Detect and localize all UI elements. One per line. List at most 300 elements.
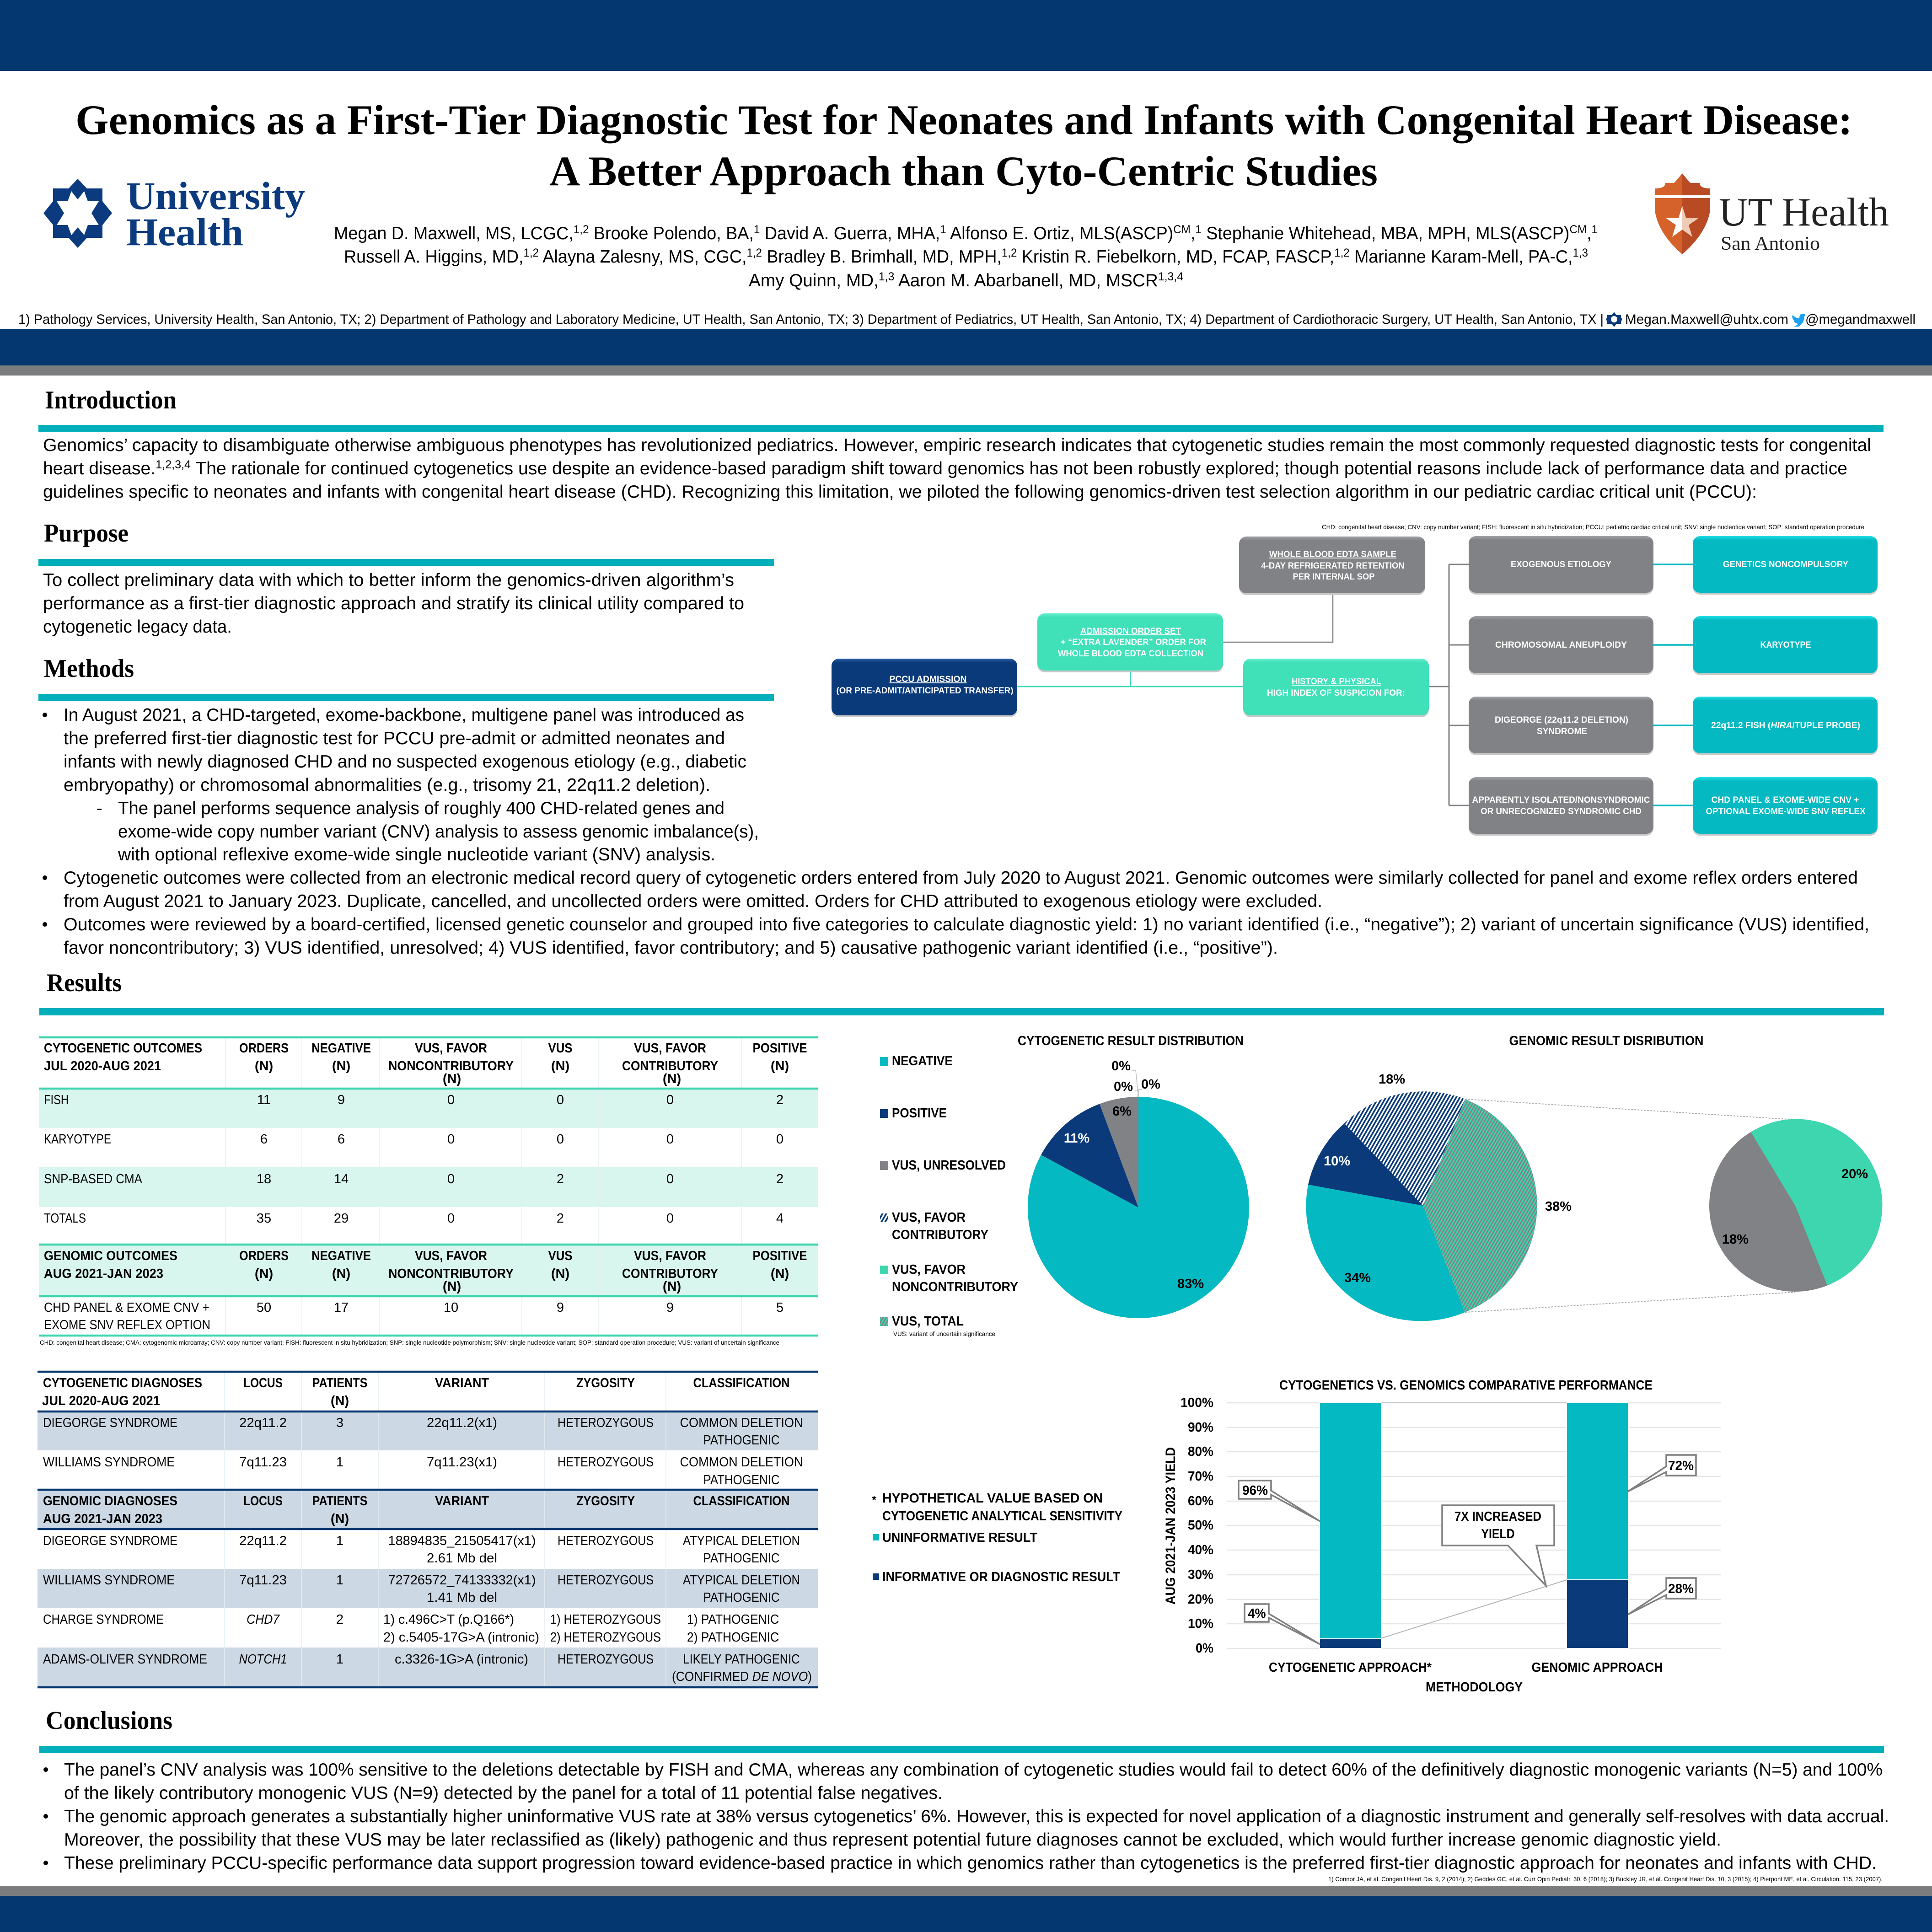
authors: CM [1173, 223, 1191, 236]
text: methods: In August 2021, a CHD-targeted, exome-backbone, multigene panel was introduced as [64, 705, 744, 725]
VUS breakdown pie: 20% [1841, 1167, 1868, 1181]
authors: 1,3,4 [1158, 270, 1183, 283]
table rows: genomic diagnoses: CHARGE SYNDROME [43, 1612, 164, 1627]
table rows: genomic diagnoses: ATYPICAL DELETION [683, 1534, 800, 1548]
legend: result categories: VUS, FAVOR [892, 1210, 966, 1225]
table header: genomic outcomes: GENOMIC OUTCOMES [44, 1249, 177, 1263]
table rows: cytogenetic outcomes: 35 [257, 1211, 271, 1226]
table rows: cytogenetic outcomes: 0 [776, 1132, 784, 1147]
table rows: cytogenetic outcomes: 2 [557, 1211, 564, 1226]
table rows: cytogenetic outcomes: 6 [338, 1132, 345, 1147]
table header: genomic outcomes: VUS, FAVOR [634, 1249, 706, 1263]
text: purpose: performance as a first-tier diagnostic approach and stratify its clinical utility compared to [43, 594, 744, 613]
table header: genomic outcomes: (N) [255, 1267, 273, 1281]
top banner [0, 0, 1932, 71]
table rows: genomic diagnoses: 2) HETEROZYGOUS [550, 1630, 661, 1645]
table rows: cytogenetic diagnoses: 1 [336, 1455, 343, 1470]
table rows: cytogenetic outcomes: 2 [776, 1172, 784, 1186]
authors: Marianne Karam-Mell, PA-C, [1350, 247, 1573, 267]
callout: 28%: 28% [1668, 1582, 1694, 1596]
table rows: cytogenetic outcomes: 0 [666, 1093, 674, 1107]
table header: cytogenetic outcomes: CONTRIBUTORY [622, 1059, 718, 1073]
text: conclusions: These preliminary PCCU-specific performance data support progression toward evidence-based practice in which genomics rather than cytogenetics is the preferred first-tier diagnostic approach for neonates and infants with CHD. [64, 1853, 1877, 1873]
table header: cytogenetic outcomes: VUS, FAVOR [415, 1041, 487, 1056]
table rows: cytogenetic outcomes: 29 [334, 1211, 349, 1226]
box: history and physical: HIGH INDEX OF SUSPICION FOR: [1267, 688, 1405, 698]
table header: cytogenetic outcomes: (N) [443, 1072, 461, 1086]
legend: result categories: POSITIVE [892, 1106, 947, 1121]
table rows: genomic diagnoses: DIGEORGE SYNDROME [43, 1534, 177, 1548]
table row: genomic outcomes: 5 [776, 1300, 784, 1315]
authors: Russell A. Higgins, MD, [344, 247, 530, 267]
table header: cytogenetic diagnoses: PATIENTS [312, 1376, 368, 1390]
row: chromosomal aneuploidy: KARYOTYPE [1760, 640, 1811, 650]
authors: 1,2 [574, 223, 589, 236]
table header: genomic outcomes: CONTRIBUTORY [622, 1267, 718, 1281]
table header: cytogenetic outcomes: JUL 2020-AUG 2021 [44, 1059, 161, 1073]
y axis labels: 50% [1188, 1518, 1213, 1533]
table header: genomic outcomes: VUS, FAVOR [415, 1249, 487, 1263]
box: whole blood EDTA sample [1239, 537, 1425, 595]
authors: 1,2 [1002, 247, 1017, 259]
y axis labels [1181, 1395, 1213, 1656]
table rows: cytogenetic outcomes: 11 [257, 1093, 271, 1107]
table rows: cytogenetic diagnoses: 22q11.2(x1) [427, 1416, 497, 1430]
table rows: genomic diagnoses: 2.61 Mb del [427, 1551, 497, 1566]
x axis labels [1269, 1660, 1663, 1695]
table header: genomic outcomes: (N) [332, 1267, 350, 1281]
x axis labels: METHODOLOGY [1426, 1680, 1523, 1695]
row: isolated or nonsyndromic CHD [1469, 777, 1878, 836]
table rows: cytogenetic outcomes: 0 [447, 1172, 455, 1186]
text: methods: favor noncontributory; 3) VUS identified, unresolved; 4) VUS identified, favor contributory; and 5) causative pathogenic variant identified (i.e., “positive”). [64, 938, 1278, 958]
authors: 1,3 [879, 270, 894, 283]
table rows: cytogenetic outcomes: TOTALS [44, 1211, 86, 1226]
callout: 4%: 4% [1248, 1606, 1266, 1621]
title [75, 97, 1852, 194]
row: isolated or nonsyndromic CHD: OR UNRECOGNIZED SYNDROMIC CHD [1481, 807, 1642, 816]
row: chromosomal aneuploidy [1469, 616, 1878, 675]
x axis labels: GENOMIC APPROACH [1531, 1660, 1663, 1675]
table rows: cytogenetic outcomes: 0 [447, 1093, 455, 1107]
main pie: 10% [1324, 1154, 1350, 1169]
VUS breakdown pie [1709, 1119, 1882, 1292]
title: A Better Approach than Cyto-Centric Studies [549, 148, 1378, 194]
table rows: cytogenetic diagnoses: 7q11.23(x1) [427, 1455, 497, 1470]
text: methods: exome-wide copy number variant (CNV) analysis to assess genomic imbalance(s), [118, 822, 759, 842]
table rows: cytogenetic diagnoses: PATHOGENIC [703, 1433, 779, 1448]
callout: 7X increased yield: 7X INCREASED [1454, 1509, 1541, 1524]
chart: cytogenetic result distribution pie: 11% [1064, 1131, 1089, 1146]
logo: UT Health San Antonio: San Antonio [1721, 233, 1820, 254]
table rows: genomic diagnoses: 1 [336, 1652, 343, 1667]
y axis labels: 0% [1196, 1641, 1213, 1656]
table header: cytogenetic diagnoses: LOCUS [243, 1376, 283, 1390]
authors: CM [1569, 223, 1587, 236]
table rows: genomic diagnoses: c.3326-1G>A (intronic) [395, 1652, 528, 1667]
row: isolated or nonsyndromic CHD: CHD PANEL & EXOME-WIDE CNV + [1712, 795, 1859, 805]
box: admission order set: + “EXTRA LAVENDER” ORDER FOR [1061, 638, 1206, 647]
table header: cytogenetic diagnoses: VARIANT [435, 1376, 489, 1390]
legend: result categories: VUS, TOTAL [892, 1314, 964, 1329]
table rows: cytogenetic diagnoses [43, 1416, 803, 1487]
bar: genomic approach [1566, 1402, 1629, 1649]
authors: 1,2 [1334, 247, 1350, 259]
box: PCCU admission: (OR PRE-ADMIT/ANTICIPATED TRANSFER) [836, 686, 1014, 696]
table header: genomic outcomes: ORDERS [239, 1249, 289, 1263]
y axis title: AUG 2021-JAN 2023 YIELD [1163, 1447, 1178, 1605]
table rows: genomic diagnoses: HETEROZYGOUS [558, 1573, 654, 1588]
table header: cytogenetic outcomes: VUS [548, 1041, 573, 1056]
affiliations and contact: @megandmaxwell [1805, 312, 1916, 327]
affiliations and contact: Megan.Maxwell@uhtx.com [1625, 312, 1788, 327]
footer band [0, 1886, 1932, 1932]
table row: genomic outcomes: 10 [444, 1300, 458, 1315]
row: exogenous etiology [1469, 536, 1878, 595]
table header: genomic diagnoses: PATIENTS [312, 1494, 368, 1508]
table header: cytogenetic outcomes: (N) [551, 1059, 569, 1073]
text: introduction: 1,2,3,4 [156, 458, 191, 471]
text: purpose: To collect preliminary data with which to better inform the genomics-driven algorithm’s [43, 570, 734, 590]
row: DiGeorge syndrome: SYNDROME [1537, 727, 1587, 736]
y axis labels: 100% [1181, 1395, 1213, 1410]
table rows: genomic diagnoses: PATHOGENIC [703, 1551, 779, 1566]
legend: result categories: VUS, FAVOR [892, 1262, 966, 1277]
table rows: genomic diagnoses: 18894835_21505417(x1) [388, 1534, 536, 1548]
authors: 1 [1195, 223, 1202, 236]
authors: 1,2 [523, 247, 539, 259]
authors: , [1191, 224, 1195, 243]
row: DiGeorge syndrome: DIGEORGE (22q11.2 DELETION) [1495, 715, 1628, 725]
y axis labels: 20% [1188, 1592, 1213, 1607]
table rows: cytogenetic diagnoses: 7q11.23 [239, 1455, 287, 1470]
y axis labels: 70% [1188, 1469, 1213, 1484]
table header: cytogenetic outcomes: (N) [771, 1059, 789, 1073]
heading: Results: Results [47, 969, 122, 997]
text: methods: Cytogenetic outcomes were collected from an electronic medical record query of cytogenetic orders entered from July 2020 to August 2021. Genomic outcomes were similarly collected for panel and exome reflex orders entered [64, 868, 1858, 888]
table rows: cytogenetic diagnoses: 22q11.2 [239, 1416, 287, 1430]
references: 1) Connor JA, et al. Congenit Heart Dis. 9, 2 (2014); 2) Geddes GC, et al. Curr Opin Pediatr. 30, 6 (2018); 3) Buckley JR, et al. Congenit Heart Dis. 10, 3 (2015); 4) Pierpont ME, et al. Circulation. 115, 23 (2007). [1328, 1875, 1883, 1883]
chart: cytogenetic result distribution pie: 0% [1114, 1079, 1133, 1094]
abbreviations note: CHD: congenital heart disease; CNV: copy number variant; FISH: fluorescent in situ hybridization; PCCU: pediatric cardiac critical unit; SNV: single nucleotide variant; SOP: standard operation procedure [1322, 523, 1864, 531]
text: methods: Outcomes were reviewed by a board-certified, licensed genetic counselor and grouped into five categories to calculate diagnostic yield: 1) no variant identified (i.e., “negative”); 2) variant of uncertain significance (VUS) identified, [64, 915, 1869, 934]
box: history and physical: HISTORY & PHYSICAL [1292, 677, 1381, 687]
table header: genomic diagnoses: LOCUS [243, 1494, 283, 1508]
table row: genomic outcomes: CHD PANEL & EXOME CNV + [44, 1300, 209, 1315]
callout: 7X increased yield [1442, 1505, 1554, 1586]
table rows: genomic diagnoses [43, 1534, 812, 1684]
table rows: cytogenetic diagnoses: HETEROZYGOUS [558, 1416, 654, 1430]
table row: genomic outcomes: 9 [666, 1300, 674, 1315]
authors: Megan D. Maxwell, MS, LCGC, [334, 224, 582, 243]
heading: Conclusions: Conclusions [46, 1707, 172, 1735]
authors: Kristin R. Fiebelkorn, MD, FCAP, FASCP, [1017, 247, 1334, 267]
y axis labels: 30% [1188, 1567, 1213, 1582]
logo: University Health: University [126, 174, 305, 218]
heading: Methods: Methods [44, 655, 134, 683]
authors [334, 223, 1598, 290]
table row: genomic outcomes: 17 [334, 1300, 349, 1315]
table header: cytogenetic diagnoses: (N) [331, 1394, 349, 1408]
authors: Amy Quinn, MD, [749, 271, 880, 290]
authors: Alfonso E. Ortiz, MLS(ASCP) [946, 224, 1173, 243]
text: methods: from August 2021 to January 2023. Duplicate, cancelled, and uncollected orders were omitted. Orders for CHD attributed to exogenous etiology were excluded. [64, 891, 1322, 911]
authors: Brooke Polendo, BA, [589, 224, 754, 243]
text: conclusions: of the likely contributory monogenic VUS (N=9) detected by the panel for a total of 11 potential false negatives. [64, 1783, 943, 1803]
table header: genomic diagnoses: ZYGOSITY [576, 1494, 635, 1508]
table header: genomic outcomes: (N) [551, 1267, 569, 1281]
flowchart: test selection algorithm [832, 523, 1878, 836]
table rows: cytogenetic outcomes: 0 [666, 1132, 674, 1147]
y axis labels: 90% [1188, 1420, 1213, 1435]
chart: cytogenetics vs genomics comparative performance [1163, 1378, 1721, 1695]
legend: result categories: CONTRIBUTORY [892, 1228, 988, 1242]
authors: 1 [1592, 223, 1598, 236]
table rows: genomic diagnoses: 7q11.23 [239, 1573, 287, 1588]
text: methods: the preferred first-tier diagnostic test for PCCU pre-admit or admitted neonates and [64, 729, 725, 748]
table rows: genomic diagnoses: 1.41 Mb del [427, 1590, 497, 1605]
box: admission order set [1037, 613, 1223, 672]
table rows: genomic diagnoses: 1) PATHOGENIC [687, 1612, 779, 1627]
y axis labels: 60% [1188, 1494, 1213, 1508]
legend: comparative performance [872, 1491, 1122, 1584]
callout: 96%: 96% [1242, 1483, 1268, 1498]
box: whole blood EDTA sample: PER INTERNAL SOP [1293, 572, 1375, 582]
logo: UT Health San Antonio [1655, 173, 1889, 254]
chart: cytogenetic result distribution pie: 0% [1141, 1077, 1160, 1092]
table rows: cytogenetic outcomes: 2 [776, 1093, 784, 1107]
text: methods: infants with newly diagnosed CHD and no suspected exogenous etiology (e.g., diabetic [64, 752, 746, 772]
row: DiGeorge syndrome: 22q11.2 FISH (HIRA/TUPLE PROBE) [1711, 721, 1860, 730]
text: conclusions [43, 1760, 1889, 1873]
legend: comparative performance: INFORMATIVE OR DIAGNOSTIC RESULT [882, 1570, 1120, 1584]
table rows: cytogenetic outcomes: 18 [257, 1172, 271, 1186]
table row: genomic outcomes: 50 [257, 1300, 271, 1315]
text: methods: embryopathy) or chromosomal abnormalities (e.g., trisomy 21, 22q11.2 deletion). [64, 775, 710, 795]
legend: result categories: NEGATIVE [892, 1054, 953, 1068]
row: chromosomal aneuploidy: CHROMOSOMAL ANEUPLOIDY [1495, 640, 1627, 650]
authors: 1 [754, 223, 760, 236]
chart: cytogenetics vs genomics comparative performance: CYTOGENETICS VS. GENOMICS COMPARATIVE PERFORMANCE [1279, 1378, 1653, 1393]
authors: 1,3 [1573, 247, 1588, 259]
table rows: genomic diagnoses: HETEROZYGOUS [558, 1652, 654, 1667]
chart: cytogenetic result distribution pie: 0% [1111, 1059, 1131, 1073]
legend: comparative performance: UNINFORMATIVE RESULT [882, 1530, 1037, 1545]
table rows: cytogenetic outcomes: FISH [44, 1093, 69, 1107]
table rows: genomic diagnoses: 1 [336, 1534, 343, 1548]
table header: genomic outcomes: NEGATIVE [311, 1249, 371, 1263]
authors: Aaron M. Abarbanell, MD, MSCR [894, 271, 1158, 290]
table rows: cytogenetic outcomes: 2 [557, 1172, 564, 1186]
legend: result categories: NONCONTRIBUTORY [892, 1280, 1018, 1294]
table header: genomic outcomes: (N) [771, 1267, 789, 1281]
chart: cytogenetic result distribution pie: 83% [1177, 1277, 1204, 1291]
callout: 4% [1245, 1604, 1320, 1644]
main pie: 18% [1379, 1072, 1405, 1087]
table header: genomic outcomes: NONCONTRIBUTORY [388, 1267, 514, 1281]
text: purpose [43, 570, 744, 637]
table rows: genomic diagnoses: 22q11.2 [239, 1534, 287, 1548]
table header: genomic diagnoses: GENOMIC DIAGNOSES [43, 1494, 177, 1508]
table header: cytogenetic diagnoses: CYTOGENETIC DIAGNOSES [43, 1376, 202, 1390]
authors: David A. Guerra, MHA, [760, 224, 940, 243]
row: exogenous etiology: GENETICS NONCOMPULSORY [1723, 560, 1848, 569]
table header: genomic diagnoses [43, 1494, 789, 1526]
table rows: genomic diagnoses: (CONFIRMED DE NOVO) [672, 1669, 812, 1684]
table header: genomic diagnoses: CLASSIFICATION [693, 1494, 789, 1508]
table row: genomic outcomes [44, 1300, 784, 1332]
table footnote: CHD: congenital heart disease; CMA: cytogenomic microarray; CNV: copy number variant; FISH: fluorescent in situ hybridization; SNP: single nucleotide polymorphism; SNV: single nucleotide variant; SOP: standard operation procedure; VUS: variant of uncertain significance [40, 1339, 779, 1346]
table header: genomic outcomes: AUG 2021-JAN 2023 [44, 1267, 163, 1281]
table row: genomic outcomes: EXOME SNV REFLEX OPTION [44, 1318, 210, 1332]
table rows: genomic diagnoses: 2) c.5405-17G>A (intronic) [383, 1630, 539, 1645]
text: conclusions: The panel’s CNV analysis was 100% sensitive to the deletions detectable by FISH and CMA, whereas any combination of cytogenetic studies would fail to detect 60% of the definitively diagnostic monogenic variants (N=5) and 100% [64, 1760, 1883, 1780]
table rows: cytogenetic outcomes [44, 1093, 784, 1226]
legend: result categories [880, 1054, 1018, 1337]
table rows: genomic diagnoses: CHD7 [247, 1612, 280, 1627]
box: whole blood EDTA sample: 4-DAY REFRIGERATED RETENTION [1261, 561, 1404, 571]
text: introduction: heart disease. [43, 459, 155, 478]
heading: Introduction: Introduction [45, 386, 177, 414]
text: methods [43, 705, 1869, 958]
table rows: genomic diagnoses: 2 [336, 1612, 343, 1627]
text: introduction [43, 435, 1871, 502]
table rows: cytogenetic outcomes: 0 [666, 1172, 674, 1186]
chart: genomic result distribution bar-of-pie: GENOMIC RESULT DISRIBUTION [1509, 1034, 1703, 1048]
table header: genomic outcomes: VUS [548, 1249, 573, 1263]
logo: UT Health San Antonio: UT Health [1719, 190, 1889, 235]
header bottom band [0, 329, 1932, 376]
table rows: cytogenetic outcomes: SNP-BASED CMA [44, 1172, 143, 1186]
table rows: cytogenetic outcomes: 0 [666, 1211, 674, 1226]
table rows: cytogenetic diagnoses: 3 [336, 1416, 343, 1430]
y axis labels: 40% [1188, 1543, 1213, 1557]
table rows: cytogenetic outcomes: 4 [776, 1211, 784, 1226]
table rows: cytogenetic diagnoses: COMMON DELETION [680, 1416, 803, 1430]
table row: genomic outcomes: 9 [557, 1300, 564, 1315]
chart: genomic result distribution bar-of-pie [1306, 1034, 1882, 1321]
VUS breakdown pie: 18% [1722, 1232, 1749, 1247]
table rows: cytogenetic outcomes: 0 [447, 1132, 455, 1147]
table rows: cytogenetic outcomes: KARYOTYPE [44, 1132, 111, 1147]
table rows: genomic diagnoses: 2) PATHOGENIC [687, 1630, 779, 1645]
callout: 72% [1628, 1455, 1696, 1492]
table header: genomic outcomes: (N) [663, 1279, 681, 1294]
authors: Bradley B. Brimhall, MD, MPH, [762, 247, 1002, 267]
table header: cytogenetic outcomes: VUS, FAVOR [634, 1041, 706, 1056]
table header: genomic outcomes: (N) [443, 1279, 461, 1294]
table rows: cytogenetic outcomes: 6 [260, 1132, 268, 1147]
box: PCCU admission: PCCU ADMISSION [889, 675, 967, 684]
table rows: genomic diagnoses: 1) HETEROZYGOUS [550, 1612, 661, 1627]
text: methods: with optional reflexive exome-wide single nucleotide variant (SNV) analysis. [118, 845, 715, 864]
table rows: cytogenetic diagnoses: HETEROZYGOUS [558, 1455, 654, 1470]
table rows: cytogenetic outcomes: 0 [557, 1132, 564, 1147]
table header: cytogenetic outcomes: (N) [255, 1059, 273, 1073]
table header: cytogenetic diagnoses: ZYGOSITY [576, 1376, 635, 1390]
legend: result categories: VUS, UNRESOLVED [892, 1158, 1006, 1173]
table rows: cytogenetic diagnoses: PATHOGENIC [703, 1473, 779, 1487]
main pie [1306, 1072, 1572, 1321]
legend: comparative performance: * [872, 1494, 876, 1506]
callout: 72%: 72% [1668, 1459, 1694, 1473]
box: whole blood EDTA sample: WHOLE BLOOD EDTA SAMPLE [1269, 550, 1396, 559]
table rows: genomic diagnoses: 72726572_74133332(x1) [388, 1573, 536, 1588]
title: Genomics as a First-Tier Diagnostic Test for Neonates and Infants with Congenital Heart Disease: [75, 97, 1852, 143]
table header: genomic outcomes: POSITIVE [753, 1249, 807, 1263]
table header: genomic outcomes [44, 1249, 807, 1294]
table header: genomic diagnoses: AUG 2021-JAN 2023 [43, 1512, 162, 1526]
logo: University Health: Health [126, 210, 243, 254]
table rows: genomic diagnoses: NOTCH1 [239, 1652, 287, 1667]
row: isolated or nonsyndromic CHD: OPTIONAL EXOME-WIDE SNV REFLEX [1706, 807, 1866, 816]
legend: comparative performance: CYTOGENETIC ANALYTICAL SENSITIVITY [882, 1509, 1122, 1524]
authors: 1,2 [746, 247, 762, 259]
box: PCCU admission [832, 659, 1017, 717]
chart: cytogenetic result distribution pie: 6% [1112, 1104, 1132, 1119]
table header: genomic diagnoses: VARIANT [435, 1494, 489, 1508]
table rows: genomic diagnoses: ADAMS-OLIVER SYNDROME [43, 1652, 207, 1667]
bar: cytogenetic approach [1319, 1402, 1382, 1649]
callout: 96% [1239, 1481, 1320, 1521]
row: isolated or nonsyndromic CHD: APPARENTLY ISOLATED/NONSYNDROMIC [1472, 795, 1650, 805]
text: purpose: cytogenetic legacy data. [43, 617, 232, 637]
row: exogenous etiology: EXOGENOUS ETIOLOGY [1511, 560, 1611, 569]
legend: result categories: VUS: variant of uncertain significance [893, 1330, 995, 1337]
table rows: cytogenetic outcomes: 0 [447, 1211, 455, 1226]
x axis labels: CYTOGENETIC APPROACH* [1269, 1660, 1432, 1675]
table header: cytogenetic diagnoses: CLASSIFICATION [693, 1376, 789, 1390]
row: DiGeorge syndrome [1469, 697, 1878, 755]
table rows: genomic diagnoses: ATYPICAL DELETION [683, 1573, 800, 1588]
table rows: cytogenetic outcomes: 9 [338, 1093, 345, 1107]
text: introduction: guidelines specific to neonates and infants with congenital heart disease (CHD). Recognizing this limitation, we piloted the following genomics-driven test selection algorithm in our pediatric cardiac critical unit (PCCU): [43, 482, 1757, 502]
table header: genomic diagnoses: (N) [331, 1512, 349, 1526]
authors: Alayna Zalesny, MS, CGC, [539, 247, 746, 267]
table header: cytogenetic outcomes: (N) [332, 1059, 350, 1073]
table header: cytogenetic diagnoses: JUL 2020-AUG 2021 [42, 1394, 160, 1408]
table header: cytogenetic outcomes [44, 1041, 807, 1086]
table rows: cytogenetic outcomes: 14 [334, 1172, 349, 1186]
authors: , [1587, 224, 1592, 243]
box: admission order set: WHOLE BLOOD EDTA COLLECTION [1058, 649, 1203, 659]
table header: cytogenetic outcomes: NEGATIVE [311, 1041, 371, 1056]
table rows: genomic diagnoses: PATHOGENIC [703, 1590, 779, 1605]
table header: cytogenetic outcomes: (N) [663, 1072, 681, 1086]
table rows: genomic diagnoses: HETEROZYGOUS [558, 1534, 654, 1548]
table header: cytogenetic outcomes: NONCONTRIBUTORY [388, 1059, 514, 1073]
connectors [1017, 564, 1693, 805]
table rows: cytogenetic diagnoses: COMMON DELETION [680, 1455, 803, 1470]
text: introduction: The rationale for continued cytogenetics use despite an evidence-based paradigm shift toward genomics has not been robustly explored; though potential reasons include lack of performance data and practice [191, 459, 1847, 478]
table header: cytogenetic outcomes: POSITIVE [753, 1041, 807, 1056]
table header: cytogenetic outcomes: CYTOGENETIC OUTCOMES [44, 1041, 202, 1056]
logo: University Health [43, 174, 305, 254]
y axis labels: 10% [1188, 1616, 1213, 1631]
callout: 28% [1628, 1578, 1696, 1615]
table: cytogenetic and genomic diagnoses [38, 1372, 818, 1687]
table header: cytogenetic diagnoses [42, 1376, 789, 1408]
text: conclusions: Moreover, the possibility that these VUS may be later reclassified as (likely) pathogenic and thus represent potential future diagnoses cannot be excluded, which would further increase genomic diagnostic yield. [64, 1830, 1721, 1850]
affiliations and contact: 1) Pathology Services, University Health, San Antonio, TX; 2) Department of Pathology and Laboratory Medicine, UT Health, San Antonio, TX; 3) Department of Pediatrics, UT Health, San Antonio, TX; 4) Department of Cardiothoracic Surgery, UT Health, San Antonio, TX | [18, 312, 1604, 327]
authors: Stephanie Whitehead, MBA, MPH, MLS(ASCP) [1202, 224, 1569, 243]
table rows: genomic diagnoses: WILLIAMS SYNDROME [43, 1573, 175, 1588]
table rows: genomic diagnoses: 1) c.496C>T (p.Q166*) [383, 1612, 514, 1627]
callout: 7X increased yield: YIELD [1481, 1527, 1515, 1541]
table rows: cytogenetic outcomes: 0 [557, 1093, 564, 1107]
main pie: 38% [1545, 1199, 1572, 1214]
table rows: genomic diagnoses: 1 [336, 1573, 343, 1588]
